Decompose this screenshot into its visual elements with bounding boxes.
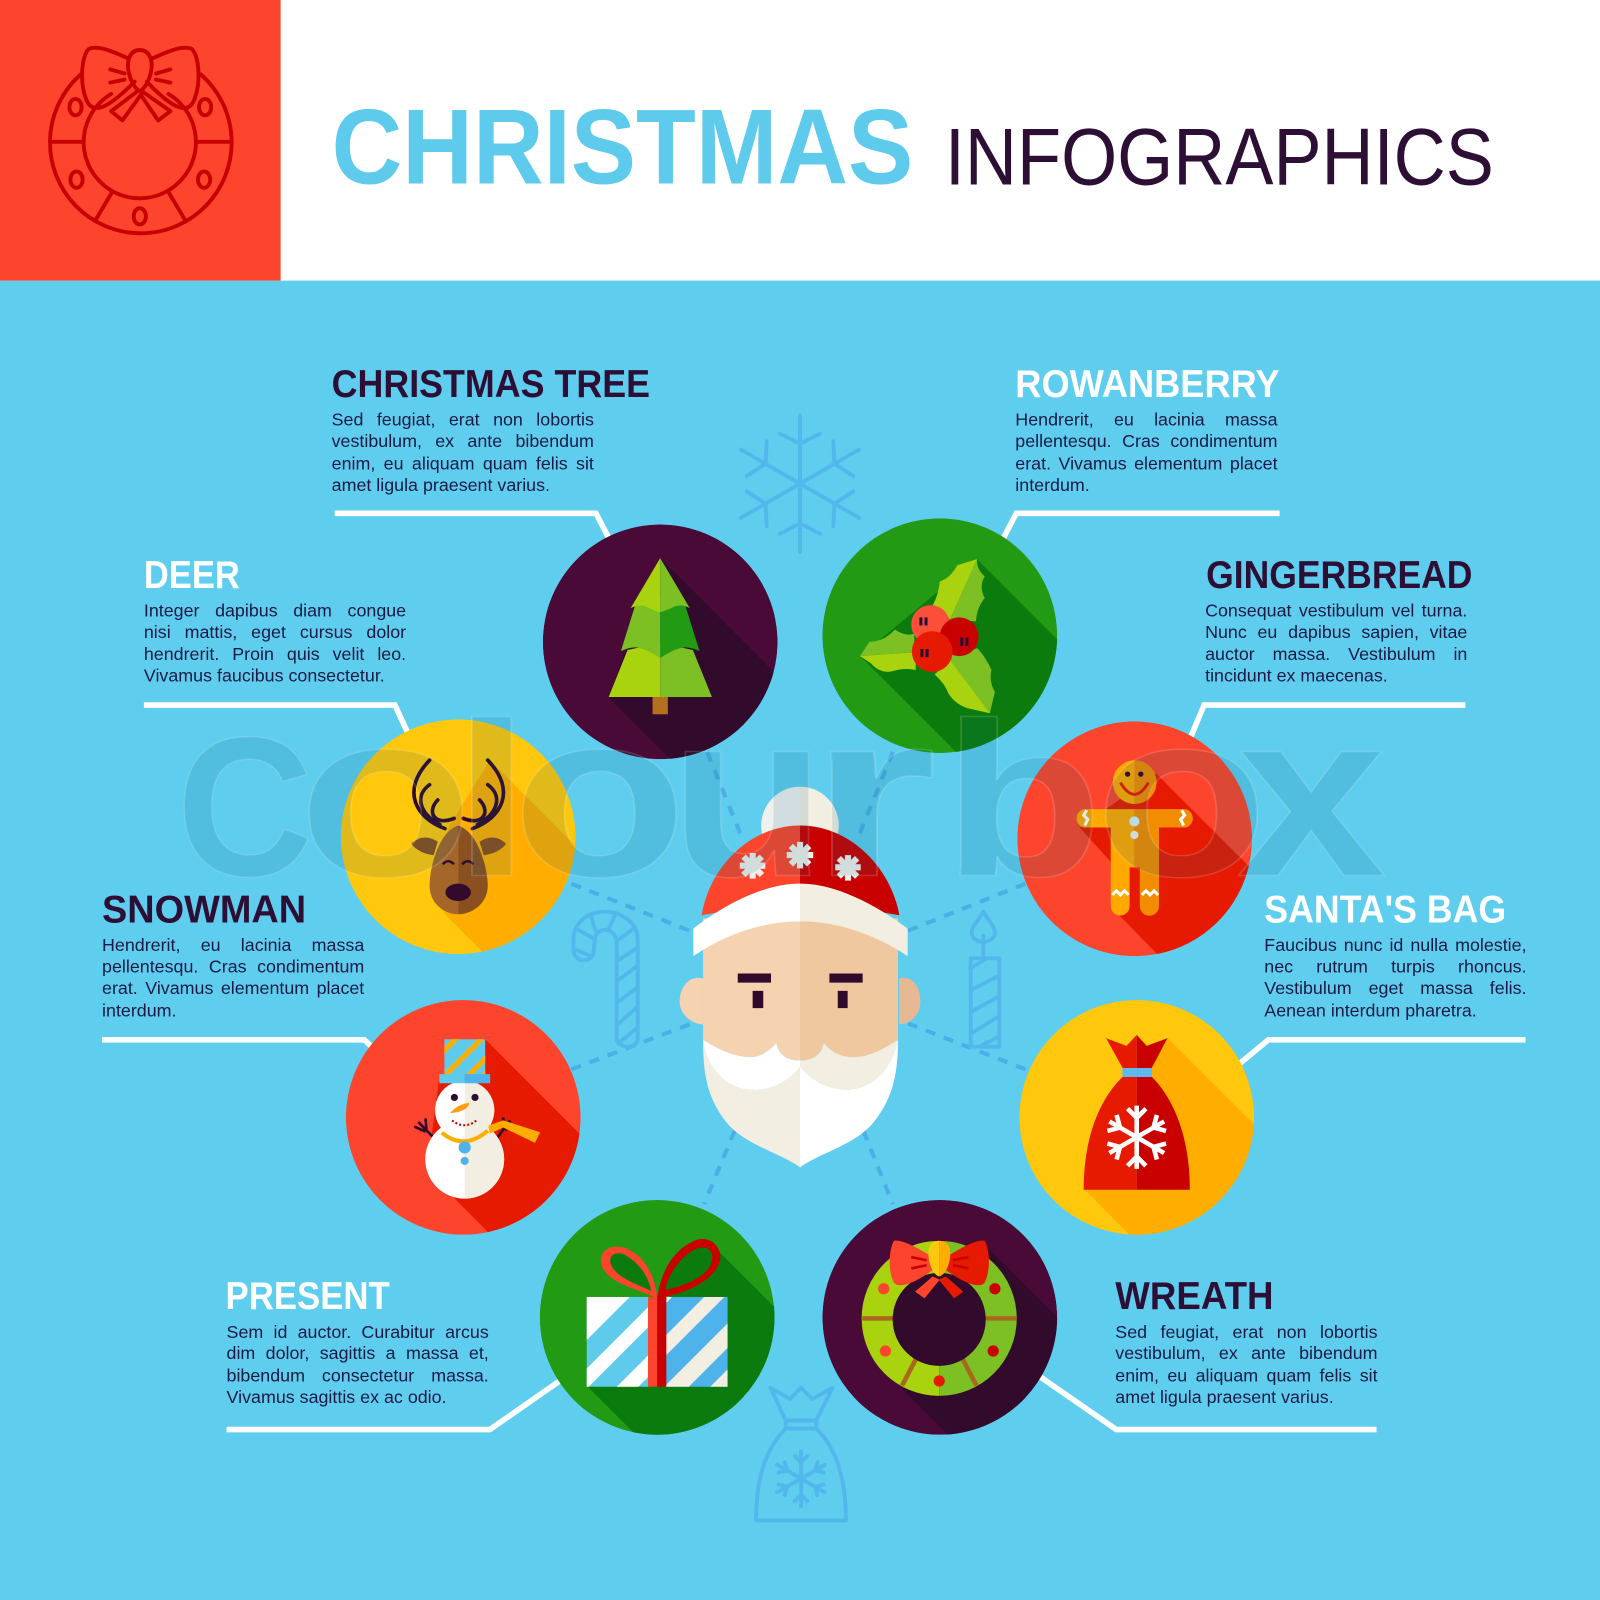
brows and eyes xyxy=(738,973,863,1008)
text: christmas tree xyxy=(332,409,599,501)
icon: christmas tree xyxy=(542,524,778,760)
panel: deer xyxy=(144,554,694,1122)
icon: holly xyxy=(822,518,1058,753)
watermark: r xyxy=(809,664,937,926)
heading: gingerbread: GINGERBREAD xyxy=(1206,554,1472,597)
leader line: rowanberry xyxy=(1003,513,1280,539)
beard xyxy=(703,1040,898,1167)
text: gingerbread: Consequat vestibulum vel turna. xyxy=(1205,600,1467,620)
hat xyxy=(693,826,908,956)
watermark: o xyxy=(512,664,687,926)
text: present: Sem id auctor. Curabitur arcus xyxy=(227,1321,489,1342)
leader line: snowman xyxy=(102,1040,379,1053)
pompom xyxy=(761,787,839,864)
watermark: o xyxy=(298,664,473,926)
watermark: u xyxy=(669,664,827,926)
title xyxy=(332,87,1494,207)
panel: santa's bag xyxy=(1019,888,1532,1394)
heading: deer: DEER xyxy=(144,554,240,597)
leader line: wreath xyxy=(1040,1377,1377,1430)
text: deer xyxy=(144,600,411,692)
panel: present xyxy=(226,1200,774,1435)
heading: wreath: WREATH xyxy=(1115,1275,1273,1318)
santa face xyxy=(680,787,920,1167)
text: rowanberry: Hendrerit, eu lacinia massa xyxy=(1015,409,1278,430)
text: wreath: Sed feugiat, erat non lobortis xyxy=(1115,1321,1378,1342)
text: gingerbread: Nunc eu dapibus sapien, vitae xyxy=(1205,622,1467,642)
text: deer: hendrerit. Proin quis velit leo. xyxy=(144,644,406,664)
heading: santa's bag: SANTA'S BAG xyxy=(1264,888,1506,931)
watermark: x xyxy=(1237,664,1386,926)
text: christmas tree: amet ligula praesent varius. xyxy=(332,475,550,495)
heading: christmas tree: CHRISTMAS TREE xyxy=(332,363,650,406)
text: santa's bag: Vestibulum eget massa felis. xyxy=(1264,978,1527,998)
text: christmas tree: vestibulum, ex ante bibendum xyxy=(332,431,594,451)
text: present: dim dolor, sagittis a massa et, xyxy=(227,1343,489,1364)
heading: present: PRESENT xyxy=(226,1275,390,1318)
text: present: bibendum consectetur massa. xyxy=(227,1365,489,1386)
leader line: present xyxy=(227,1381,560,1430)
icon: present xyxy=(540,1200,774,1435)
icon: background snowflake xyxy=(731,415,869,552)
panel: wreath xyxy=(822,1200,1378,1435)
leader line: christmas tree xyxy=(335,513,609,539)
ears xyxy=(680,978,920,1024)
text: santa's bag: nec rutrum turpis rhoncus. xyxy=(1264,956,1527,976)
icon: santa's bag xyxy=(1019,1000,1254,1235)
watermark: o xyxy=(1095,664,1268,926)
watermark xyxy=(177,664,1386,926)
dashed connectors xyxy=(571,752,1026,1204)
icon: background bag xyxy=(756,1388,846,1520)
icon: gingerbread xyxy=(1017,721,1252,956)
text: wreath: vestibulum, ex ante bibendum xyxy=(1115,1343,1378,1364)
leader line: gingerbread xyxy=(1191,705,1465,737)
watermark: b xyxy=(943,678,1103,923)
icon: snowman xyxy=(346,1000,581,1235)
text: santa's bag xyxy=(1264,934,1532,1026)
heading: snowman: SNOWMAN xyxy=(102,888,306,931)
text: christmas tree: enim, eu aliquam quam felis sit xyxy=(332,453,594,473)
icon: deer xyxy=(340,719,576,954)
text: deer: nisi mattis, eget cursus dolor xyxy=(144,622,406,642)
leader line: santa's bag xyxy=(1239,1040,1526,1064)
text: rowanberry: erat. Vivamus elementum placet xyxy=(1015,453,1278,473)
text: deer: Integer dapibus diam congue xyxy=(144,600,406,620)
text: christmas tree: Sed feugiat, erat non lobortis xyxy=(332,409,594,430)
text: rowanberry: interdum. xyxy=(1015,475,1090,495)
text: santa's bag: Aenean interdum pharetra. xyxy=(1264,1000,1477,1020)
title: INFOGRAPHICS xyxy=(945,113,1494,203)
icon: background candy cane xyxy=(573,912,638,1047)
text: snowman: erat. Vivamus elementum placet xyxy=(102,978,364,998)
text: snowman xyxy=(102,934,369,1026)
panel: gingerbread xyxy=(1017,554,1472,1116)
text: wreath xyxy=(1115,1321,1383,1413)
header band xyxy=(0,0,1600,281)
leader line: deer xyxy=(144,705,408,734)
text: gingerbread: auctor massa. Vestibulum in xyxy=(1205,644,1467,664)
icon: wreath xyxy=(822,1200,1058,1435)
watermark: C xyxy=(177,697,313,919)
text: rowanberry: pellentesqu. Cras condimentum xyxy=(1015,431,1278,451)
text: wreath: enim, eu aliquam quam felis sit xyxy=(1115,1365,1378,1386)
heading: rowanberry: ROWANBERRY xyxy=(1015,363,1280,406)
text: rowanberry xyxy=(1015,409,1283,501)
text: deer: Vivamus faucibus consectetur. xyxy=(144,666,385,686)
panel: snowman xyxy=(102,888,689,1388)
text: santa's bag: Faucibus nunc id nulla molestie, xyxy=(1264,934,1527,955)
title: CHRISTMAS xyxy=(332,87,913,207)
text: present: Vivamus sagittis ex ac odio. xyxy=(227,1387,447,1407)
text: gingerbread: tincidunt ex maecenas. xyxy=(1205,666,1388,686)
text: wreath: amet ligula praesent varius. xyxy=(1115,1387,1334,1407)
text: snowman: interdum. xyxy=(102,1000,176,1020)
hat snowflakes xyxy=(740,842,861,881)
text: snowman: Hendrerit, eu lacinia massa xyxy=(102,934,364,955)
icon: wreath outline xyxy=(50,48,232,233)
text: snowman: pellentesqu. Cras condimentum xyxy=(102,956,364,976)
panel: rowanberry xyxy=(822,363,1283,860)
icon: background candle xyxy=(970,912,999,1047)
panel: christmas tree xyxy=(332,363,864,901)
face xyxy=(703,918,898,1060)
watermark: l xyxy=(452,678,532,923)
text: present xyxy=(227,1321,494,1413)
text: gingerbread xyxy=(1205,600,1472,692)
